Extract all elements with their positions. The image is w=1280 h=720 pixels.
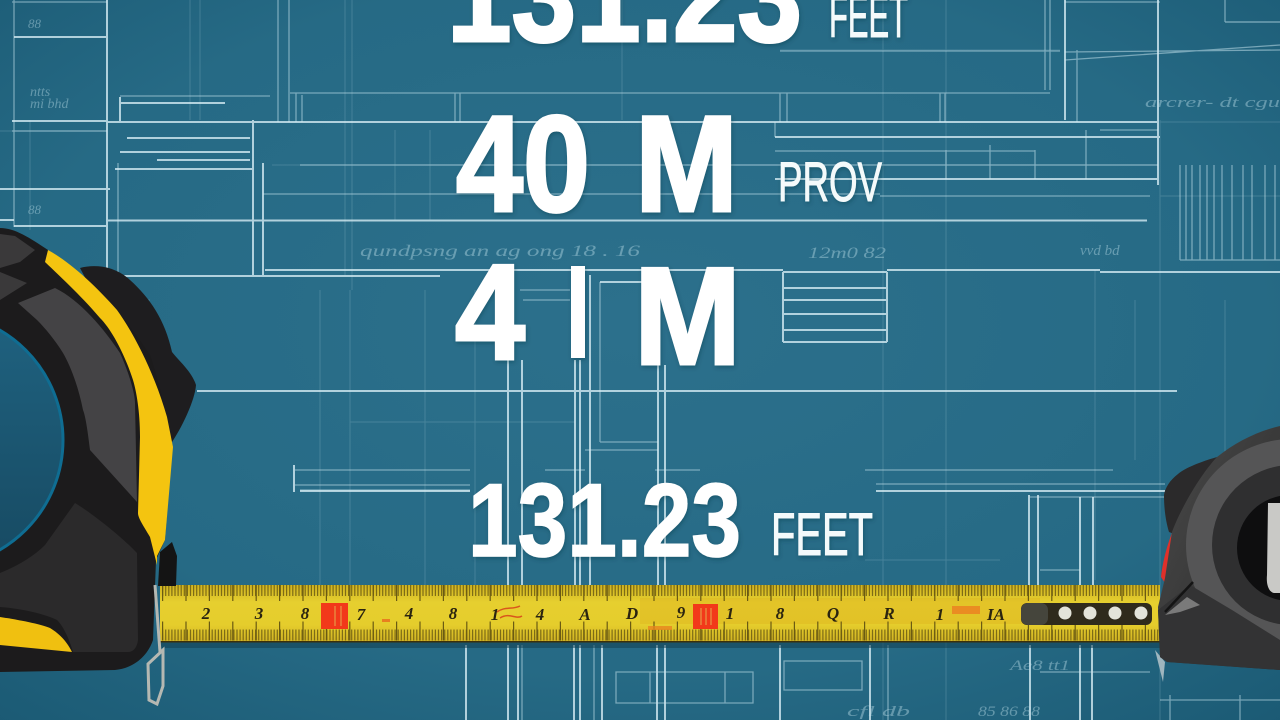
top grey facets [0, 234, 35, 300]
tape numbers: R [882, 604, 895, 623]
figure: 4 I M [455, 236, 741, 394]
tape numbers: D [625, 604, 638, 623]
silver plate [1267, 503, 1280, 593]
left tape measure case [0, 228, 196, 704]
blueprint scribble notes: 88 [28, 202, 42, 217]
lower case shell [1158, 585, 1280, 670]
tape numbers: 2 [201, 604, 211, 623]
figure: 4 I M: M [634, 239, 741, 394]
figure: 40 M: 40 [456, 88, 590, 241]
right tape measure case [1155, 426, 1280, 682]
tape numbers: 1 [936, 605, 944, 624]
blueprint scribble notes: qundpsng an ag ong 18 . 16 [360, 243, 640, 260]
unit: FEET bottom: FEET [771, 501, 873, 568]
lower grey panel [0, 503, 138, 652]
figure: 4 I M: 4 [455, 236, 525, 388]
blueprint scribble notes: cfl db [847, 704, 911, 720]
upper grey panel [18, 288, 137, 502]
tape numbers: 4 [404, 604, 413, 623]
red accent [1161, 533, 1172, 583]
rear grip [1164, 457, 1217, 534]
unit: PROV: PROV [778, 150, 882, 213]
tape numbers: A [578, 605, 591, 624]
yellow side band [45, 250, 173, 565]
tape numbers [201, 603, 1005, 624]
figure: 40 M [456, 88, 738, 241]
case body [0, 228, 172, 672]
dial window [0, 313, 63, 567]
blueprint scribble notes: 85 86 88 [978, 704, 1041, 720]
tape numbers: 8 [301, 604, 310, 623]
tape numbers: IA [986, 605, 1005, 624]
tape numbers: Q [827, 604, 839, 623]
figure: 40 M: M [635, 88, 738, 241]
case notch [1165, 597, 1200, 615]
measurement text block [447, 0, 908, 579]
hook shard [1155, 650, 1165, 682]
figure: 131.23 bottom: 131.23 [468, 463, 741, 579]
tape numbers: 9 [677, 603, 686, 622]
red tape markers [321, 603, 980, 630]
tape end slot with rivets [1021, 603, 1152, 625]
tape numbers: 3 [254, 604, 264, 623]
blueprint scribble notes: vvd bd [1080, 243, 1120, 259]
tape numbers: 8 [449, 604, 458, 623]
blueprint scribble notes: Ae8 tt1 [1009, 658, 1070, 674]
tape numbers: 1 [726, 604, 734, 623]
blueprint scribble notes: mi bhd [30, 97, 70, 112]
metal tape hook [148, 585, 163, 704]
blueprint scribble notes: arcrer- dt cgu [1145, 95, 1280, 111]
blueprint scribble notes: 88 [28, 16, 42, 31]
lower yellow accent [0, 617, 72, 652]
tape numbers: 4 [535, 605, 544, 624]
black hub [1237, 495, 1280, 601]
rear grip bump [80, 266, 196, 445]
blueprint scribble notes: ntts [30, 85, 51, 100]
tape numbers: 1 [491, 605, 499, 624]
tape exit clip [158, 542, 177, 586]
yellow measuring tape blade [160, 585, 1160, 648]
tape numbers: 7 [357, 605, 367, 624]
case body [1158, 426, 1280, 670]
body ring [1186, 439, 1280, 651]
blueprint scribble notes: 12m0 82 [808, 245, 886, 262]
tape numbers: 8 [776, 604, 785, 623]
